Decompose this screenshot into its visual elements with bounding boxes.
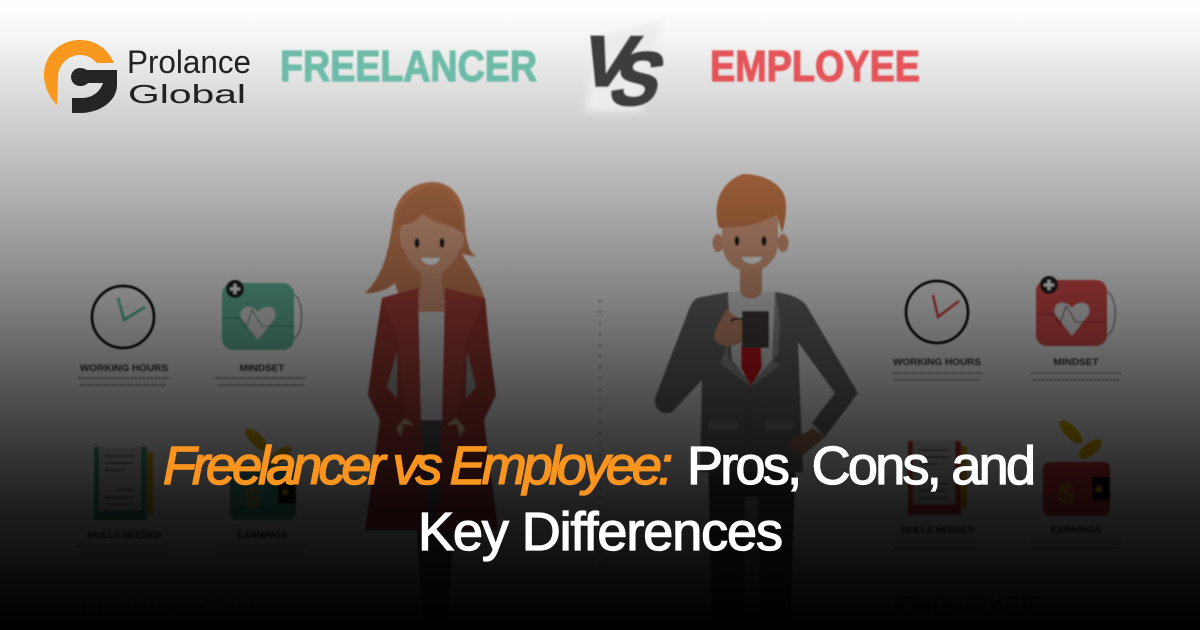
logo mark (44, 40, 117, 113)
logo wordmark: Prolance (127, 44, 251, 80)
icon: notebook (908, 441, 967, 515)
face (400, 214, 464, 275)
icon: clock (906, 281, 968, 343)
left column: freelancer icons (78, 280, 306, 622)
center dotted divider (599, 300, 601, 585)
icon: mindset heart (222, 280, 302, 350)
top (417, 312, 445, 420)
hand and mug (714, 310, 745, 346)
legs (708, 450, 796, 630)
icon: notebook (94, 447, 153, 520)
label: working hours: WORKING HOURS (893, 357, 981, 368)
title line two: Key Differences (418, 502, 783, 562)
heading: freelancer: FREELANCER (280, 42, 537, 91)
red tie (741, 345, 762, 386)
hands (396, 418, 465, 437)
vs badge: S (601, 38, 675, 122)
label: skills needed: SKILLS NEEDED (87, 530, 161, 541)
suit (655, 292, 858, 472)
icon: clock (92, 286, 154, 348)
freelancer woman figure (365, 182, 498, 630)
title rest of line one: Pros, Cons, and (687, 436, 1036, 496)
hair (717, 174, 786, 233)
neck (740, 265, 762, 298)
vs badge: V (571, 21, 648, 102)
title (163, 436, 1036, 562)
label: mindset: MINDSET (240, 363, 285, 374)
bottom label: employee: EMPLOYEE (893, 590, 1038, 620)
icon: wallet and coins: $ (1058, 479, 1074, 509)
caption lines (78, 378, 306, 385)
icon: wallet and coins: $ (244, 483, 260, 513)
label: mindset: MINDSET (1054, 357, 1099, 368)
lapels (720, 292, 780, 387)
label: skills needed: SKILLS NEEDED (900, 525, 974, 536)
hand on hip (788, 428, 825, 455)
label: earnings: EARNINGS (237, 530, 287, 541)
face (722, 215, 778, 272)
pocket slits (387, 352, 476, 398)
title highlight: Freelancer vs Employee: (163, 436, 673, 496)
background illustration (78, 174, 1121, 630)
heading: employee: EMPLOYEE (710, 42, 920, 91)
icon: mindset heart (1036, 276, 1115, 346)
label: earnings: EARNINGS (1051, 525, 1101, 536)
vs haze (585, 20, 664, 112)
neck and chest (417, 265, 446, 312)
vs badge (571, 20, 675, 122)
hair fringe (396, 186, 464, 234)
label: working hours: WORKING HOURS (80, 363, 168, 374)
employee man figure (655, 174, 858, 630)
logo: Prolance Global (44, 40, 251, 113)
right column: employee icons (892, 276, 1121, 620)
icon: wallet and coins (230, 425, 296, 520)
suit buttons line and pockets (709, 421, 793, 430)
legs (416, 415, 454, 630)
bottom label: freelancer: FREELANCER (80, 592, 255, 622)
logo: Prolance Global: Global (128, 79, 246, 109)
icon: wallet and coins (1043, 417, 1110, 516)
ears (712, 234, 724, 252)
red blazer (365, 288, 498, 530)
hair back (365, 182, 486, 312)
shirt (728, 292, 775, 372)
